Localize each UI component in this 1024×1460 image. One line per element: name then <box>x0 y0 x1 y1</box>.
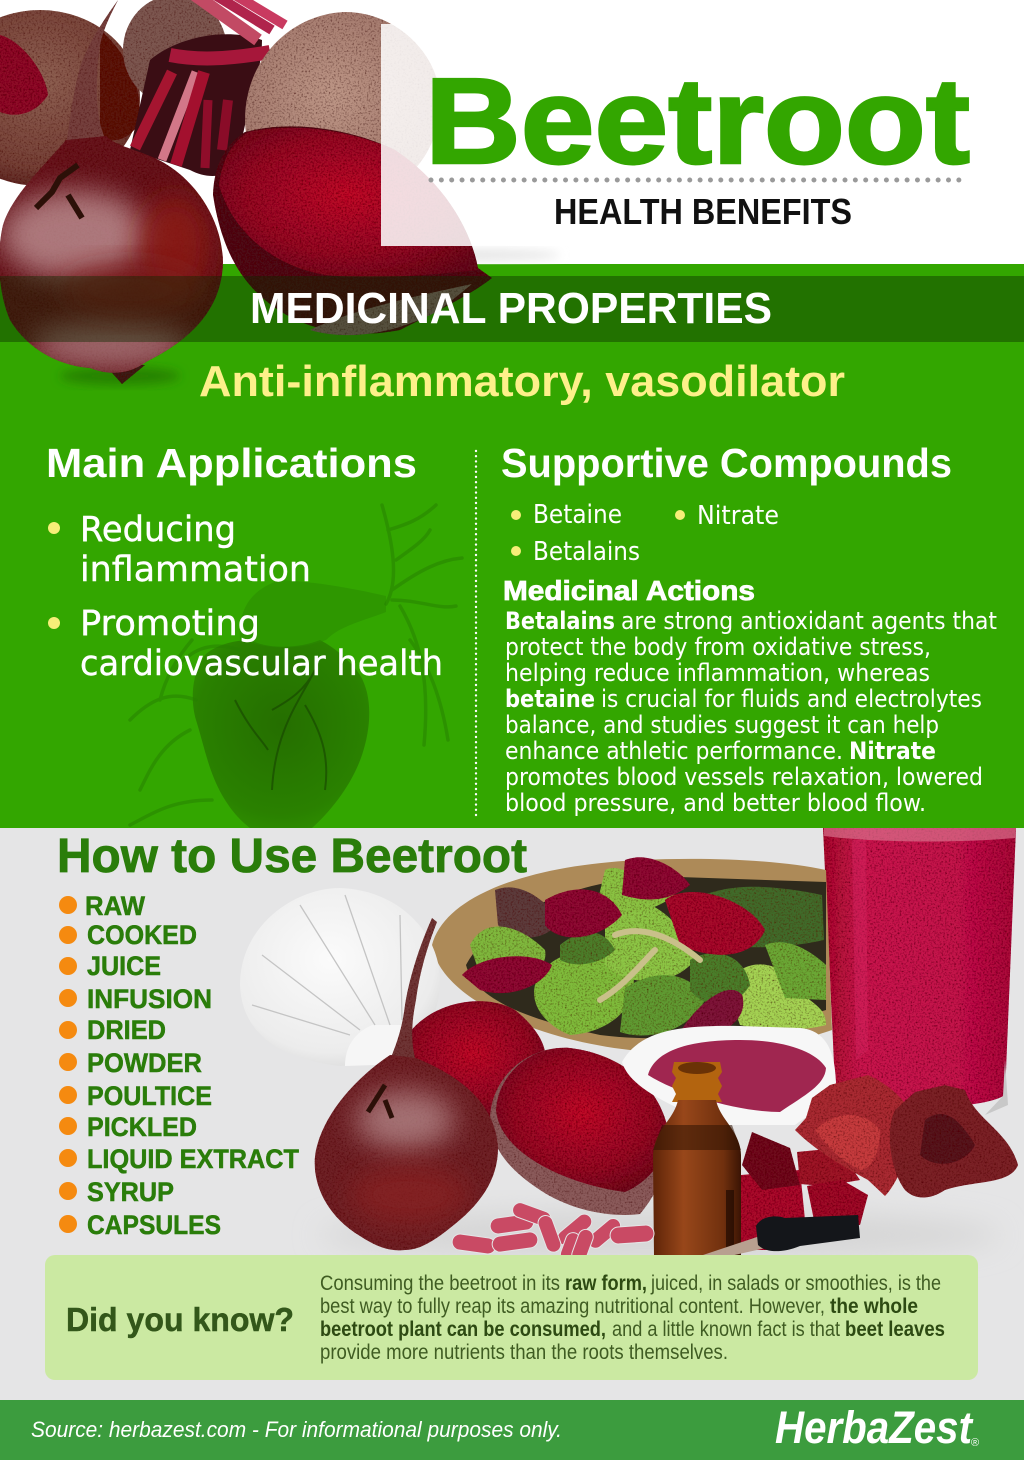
juice glass <box>823 828 1016 1115</box>
callout text: raw form, <box>565 1272 647 1295</box>
compound list: Betalains <box>533 537 640 567</box>
title: Beetroot: Beetroot <box>425 53 970 189</box>
translucent white title panel <box>381 24 1024 246</box>
dotted title divider <box>431 178 960 182</box>
registered mark: ® <box>971 1437 979 1449</box>
callout text: beet leaves <box>845 1318 945 1341</box>
callout text: Consuming the beetroot in its <box>320 1272 560 1295</box>
back right beet <box>245 12 440 198</box>
bullet: promoting cardiovascular health: Promoting <box>80 604 260 644</box>
gray how-to-use section background <box>0 828 1024 1400</box>
dark right side of back left beet <box>100 30 140 141</box>
cut beet flesh <box>219 128 478 277</box>
image: fresh beetroots photo <box>0 0 560 385</box>
bottle neck <box>672 1062 722 1102</box>
whole beet stem <box>66 0 118 145</box>
medicinal actions text: is crucial for fluids and electrolytes <box>601 685 982 713</box>
bullet: reducing inflammation: Reducing <box>80 510 236 550</box>
heading: how to use beetroot: How to Use Beetroot <box>57 830 527 883</box>
cut beet rind underside <box>310 284 472 335</box>
pouch knot <box>345 1025 415 1066</box>
shadow on green below whole beet <box>60 367 180 385</box>
medicinal actions text: betaine <box>505 685 595 713</box>
beet stems <box>135 0 285 168</box>
capsules <box>451 1201 655 1264</box>
list: ways to use: LIQUID EXTRACT <box>87 1144 299 1174</box>
list: ways to use: JUICE <box>87 951 161 981</box>
soft shadow under the cut beet <box>380 249 560 261</box>
dropper <box>700 1215 860 1256</box>
list: ways to use: COOKED <box>87 920 197 950</box>
image: heart illustration watermark <box>130 505 462 828</box>
vessels <box>130 505 462 825</box>
dropper glass pipette <box>700 1236 766 1256</box>
list: ways to use: CAPSULES <box>87 1210 221 1240</box>
back beets <box>0 0 227 186</box>
whole beet shading <box>0 190 210 370</box>
white poultice pouch <box>240 888 440 1066</box>
medicinal actions text: balance, and studies suggest it can help <box>505 711 939 739</box>
callout heading: Did you know? <box>66 1301 294 1338</box>
whole beet scars <box>36 165 82 218</box>
back left beet <box>0 10 140 186</box>
juice foam <box>824 828 1016 842</box>
compound list: Nitrate <box>697 501 779 531</box>
medicinal actions text: enhance athletic performance. <box>505 737 843 765</box>
dried beet chips <box>795 1075 1018 1198</box>
beet cubes <box>741 1132 868 1250</box>
footer bar <box>0 1400 1024 1460</box>
callout text: beetroot plant can be consumed, <box>320 1318 606 1341</box>
heading: main applications: Main Applications <box>46 440 417 486</box>
list: ways to use: RAW <box>85 891 145 921</box>
salad bowl <box>432 857 832 1054</box>
callout text: provide more nutrients than the roots themselves. <box>320 1341 728 1364</box>
juice highlight <box>852 840 868 1060</box>
callout text: the whole <box>830 1295 918 1318</box>
bottle opening <box>678 1062 716 1074</box>
cut beet rind <box>213 126 492 334</box>
bullet: reducing inflammation: inflammation <box>80 550 311 590</box>
callout: did you know <box>45 1255 978 1380</box>
aorta and pulmonary arteries <box>240 580 386 648</box>
salad leaves <box>470 868 826 1035</box>
whole beet body <box>0 136 223 373</box>
list: ways to use: PICKLED <box>87 1112 197 1142</box>
bowl interior <box>466 876 826 1038</box>
list: ways to use: SYRUP <box>87 1177 174 1207</box>
medicinal actions text <box>505 607 997 817</box>
panel: supportive compounds <box>501 440 997 817</box>
green medicinal section background <box>0 264 1024 828</box>
soft shadow under the products <box>320 1210 1000 1260</box>
sauce dish <box>622 1026 836 1125</box>
dotted vertical divider <box>475 451 477 818</box>
callout text: best way to fully reap its amazing nutritional content. However, <box>320 1295 825 1318</box>
medicinal actions text: helping reduce inflammation, whereas <box>505 659 930 687</box>
pouch folds <box>252 895 402 1035</box>
dressing drizzle <box>600 931 700 1000</box>
list: ways to use: INFUSION <box>87 984 212 1014</box>
dark stem cluster <box>130 34 262 176</box>
glass base <box>985 1060 1008 1115</box>
bullet: promoting cardiovascular health <box>48 604 443 684</box>
callout text: juiced, in salads or smoothies, is the <box>650 1272 941 1295</box>
bullet: promoting cardiovascular health: cardiovascular health <box>80 644 443 684</box>
compound list: Betaine <box>533 500 622 530</box>
beet scars <box>368 1085 392 1118</box>
medicinal actions text: are strong antioxidant agents that <box>621 607 997 635</box>
front cut beet <box>490 1048 670 1215</box>
back middle beet <box>123 0 227 105</box>
medicinal actions text: blood pressure, and better blood flow. <box>505 789 926 817</box>
list: ways to use: DRIED <box>87 1015 166 1045</box>
back beet slice <box>402 1001 546 1118</box>
whole beet with stem <box>315 918 498 1250</box>
logo: HerbaZest: HerbaZest <box>775 1402 974 1453</box>
heading: medicinal properties: MEDICINAL PROPERTIES <box>250 284 772 333</box>
heading: medicinal actions: Medicinal Actions <box>503 575 755 606</box>
subtitle: health benefits: HEALTH BENEFITS <box>554 191 852 232</box>
list: ways to use: POWDER <box>87 1048 202 1078</box>
image: beetroot preparations photo <box>240 828 1018 1264</box>
beet slices in salad <box>462 857 765 1042</box>
properties line: Anti-inflammatory, vasodilator <box>199 357 845 406</box>
heart body <box>193 640 369 828</box>
bowl <box>432 859 832 1054</box>
medicinal actions text: promotes blood vessels relaxation, lowered <box>505 763 983 791</box>
whole beet <box>0 0 223 384</box>
medicinal actions text: Betalains <box>505 607 615 635</box>
bullet: reducing inflammation <box>48 510 311 590</box>
source note: Source: herbazest.com - For informational purposes only. <box>31 1417 562 1442</box>
dropper cap <box>756 1215 860 1251</box>
callout text <box>320 1272 945 1364</box>
compound list <box>511 500 779 567</box>
whole beet root tip <box>105 365 145 384</box>
callout text: and a little known fact is that <box>612 1318 840 1341</box>
back left beet crown <box>0 35 48 115</box>
cut beet <box>213 126 492 335</box>
bottle body <box>653 1100 741 1256</box>
medicinal actions text: Nitrate <box>849 737 936 765</box>
list: ways to use <box>59 891 299 1240</box>
panel: main applications <box>46 440 443 684</box>
list: ways to use: POULTICE <box>87 1081 212 1111</box>
medicinal actions text: protect the body from oxidative stress, <box>505 633 931 661</box>
coronary vessels <box>235 670 326 790</box>
bottle reflection <box>726 1190 734 1250</box>
dark band: medicinal properties <box>0 276 1024 342</box>
bottle shoulder shadow <box>653 1125 741 1150</box>
amber essential oil bottle <box>653 1062 741 1256</box>
whole beet highlights <box>350 1090 470 1225</box>
heading: supportive compounds: Supportive Compounds <box>501 440 952 486</box>
